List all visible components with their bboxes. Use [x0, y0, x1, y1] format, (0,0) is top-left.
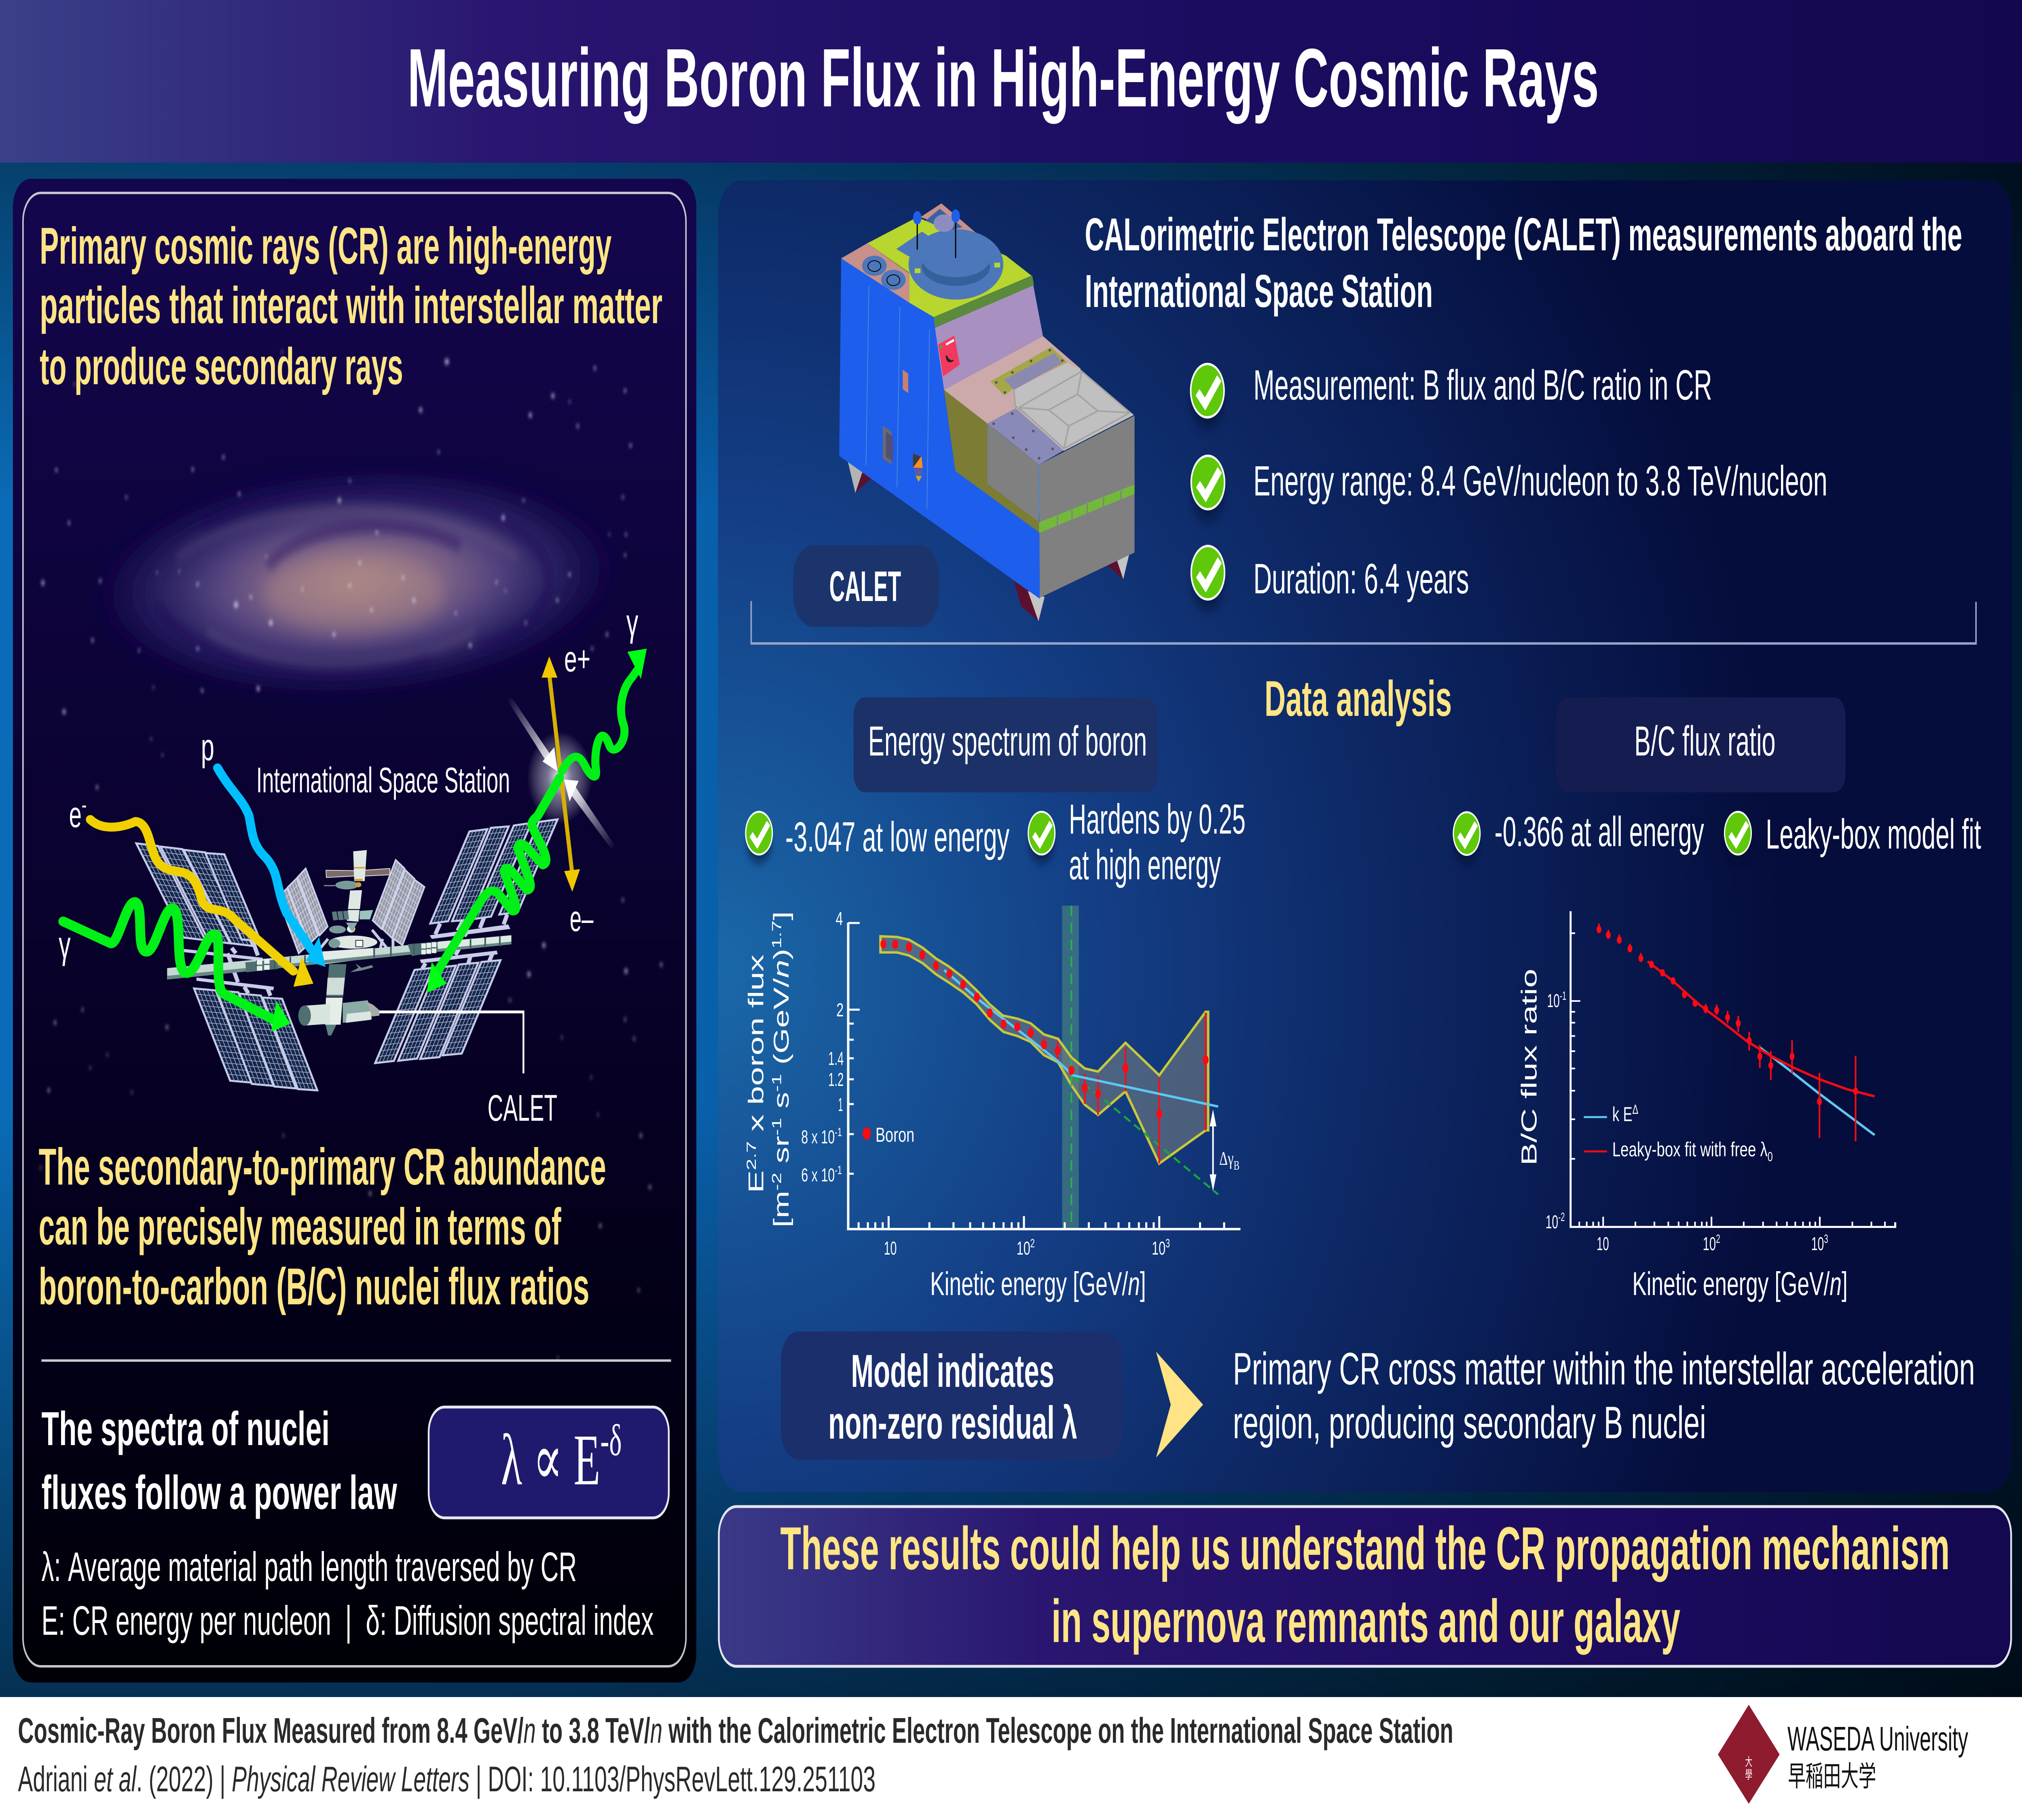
title banner: [0, 0, 2022, 163]
legend: boron: Boron: [876, 1123, 914, 1146]
text: secondary-to-primary abundance: can be precisely measured in terms of: [39, 1198, 561, 1256]
ISS illustration with cosmic-ray tracks: [39, 601, 671, 1644]
particle and station labels: e: [69, 794, 82, 835]
axis title: boron flux: [m: [770, 1189, 793, 1227]
legend: fits: [1612, 1102, 1773, 1164]
axis title: boron flux: x boron flux: [744, 954, 768, 1141]
boron checklist: at high energy: [1069, 841, 1221, 889]
citation text: Adriani et al. (2022) | Physical Review Letters | DOI: 10.1103/PhysRevLett.129.251103: [18, 1759, 876, 1799]
axis title: boron flux: (GeV/: [770, 978, 793, 1074]
y-axis tick labels: 1.4: [828, 1048, 844, 1069]
y-axis tick labels: 8 x 10: [801, 1127, 833, 1148]
conclusion banner: These results could help us understand the CR propagation mechanism: [780, 1515, 1950, 1583]
y-axis tick labels: 1.2: [828, 1069, 844, 1090]
heading: data analysis: Data analysis: [1265, 670, 1452, 726]
axis title: boron flux: s: [770, 1092, 793, 1118]
text: secondary-to-primary abundance: [39, 1138, 606, 1316]
title banner: Measuring Boron Flux in High-Energy Cosmic Rays: [408, 32, 1599, 124]
x-axis tick labels: 10: [1597, 1234, 1609, 1255]
measurement checklist: Energy range: 8.4 GeV/nucleon to 3.8 TeV/nucleon: [1253, 457, 1827, 505]
legend: fits: Leaky-box fit with free λ: [1612, 1138, 1745, 1161]
y-axis tick labels: 2: [836, 1000, 844, 1021]
y-axis tick labels: 10: [1546, 1212, 1559, 1233]
y-axis tick labels: 10: [1547, 990, 1560, 1012]
legend: fits: Δ: [1633, 1102, 1638, 1117]
text: power law: [41, 1402, 397, 1519]
model result box: non-zero residual λ: [828, 1397, 1077, 1449]
model result box: [781, 1331, 1123, 1460]
logo: Waseda University: WASEDA University: [1787, 1720, 1968, 1758]
citation text: Cosmic-Ray Boron Flux Measured from 8.4 GeV/n to 3.8 TeV/n with the Calorimetric Electron Telescope on the International Space Station: [18, 1711, 1453, 1750]
text: primary cosmic rays: particles that interact with interstellar matter: [40, 276, 662, 334]
y-axis tick labels: 1: [838, 1094, 843, 1115]
particle and station labels: p: [201, 726, 214, 768]
particle and station labels: [59, 601, 639, 1129]
text: model implication: Primary CR cross matter within the interstellar acceleration: [1233, 1344, 1975, 1395]
axis title: boron flux: 1.7: [770, 921, 784, 949]
axis title: boron flux: -2: [770, 1172, 784, 1191]
logo: Waseda University: 大: [1745, 1752, 1752, 1769]
model result box: Model indicates: [851, 1346, 1054, 1397]
particle and station labels: e+: [564, 638, 590, 679]
axis title: boron flux: ]: [770, 911, 793, 921]
legend: fits: k E: [1612, 1103, 1631, 1126]
x-axis tick labels: 2: [1030, 1237, 1035, 1250]
y-axis tick labels: 6 x 10: [801, 1165, 833, 1186]
panel: measurements and data analysis (right): [718, 180, 2012, 1492]
gamma track, right outgoing (green): [562, 649, 647, 777]
text: model implication: region, producing secondary B nuclei: [1233, 1397, 1706, 1448]
left panel background: [13, 179, 696, 1682]
text: symbol definitions: [41, 1544, 654, 1644]
x-axis tick labels: 3: [1824, 1232, 1828, 1246]
particle and station labels: International Space Station: [256, 760, 510, 800]
text: secondary-to-primary abundance: The secondary-to-primary CR abundance: [39, 1138, 606, 1196]
text: secondary-to-primary abundance: boron-to-carbon (B/C) nuclei flux ratios: [39, 1257, 590, 1316]
axis title: boron flux: sr: [770, 1136, 793, 1172]
y-axis tick labels: [801, 908, 844, 1186]
B/C flux ratio label: B/C flux ratio: [1634, 717, 1776, 765]
measurement checklist: [1191, 361, 1827, 610]
x-axis tick labels: 10: [1017, 1238, 1030, 1259]
text: primary cosmic rays: Primary cosmic rays (CR) are high-energy: [40, 217, 611, 275]
CALET label: [793, 545, 939, 627]
boron checklist: -3.047 at low energy: [785, 813, 1010, 861]
axis title: boron flux: -1: [770, 1118, 784, 1136]
formula box: -δ: [600, 1416, 622, 1465]
footer: [0, 1697, 2022, 1820]
y-axis tick labels: 4: [835, 908, 843, 929]
axis title: boron flux: [744, 911, 793, 1227]
formula box: [429, 1407, 669, 1518]
y-axis tick labels: -1: [835, 1164, 842, 1177]
citation text: [18, 1711, 1453, 1799]
axis title: kinetic energy: Kinetic energy [GeV/n]: [930, 1266, 1146, 1302]
axis title: B/C flux ratio: B/C flux ratio: [1517, 969, 1541, 1166]
logo: Waseda University: 學: [1745, 1765, 1752, 1782]
ISS central modules: [298, 935, 379, 1035]
ISS truss: [167, 935, 512, 980]
y-axis tick labels: -1: [1560, 989, 1566, 1003]
particle and station labels: -: [82, 791, 87, 818]
axis title: boron flux: E: [744, 1170, 768, 1193]
conclusion banner: in supernova remnants and our galaxy: [1051, 1587, 1680, 1655]
ISS solar arrays, left: [136, 843, 317, 1090]
right panel background: [718, 180, 2012, 1492]
particle and station labels: CALET: [488, 1088, 557, 1129]
text: primary cosmic rays: [40, 217, 662, 396]
gamma track, left (green): [63, 902, 290, 1032]
CALET label: CALET: [829, 562, 901, 610]
pair-production glow and arrows: [508, 656, 615, 892]
axis title: boron flux: 2.7: [744, 1141, 759, 1170]
B/C checklist: -0.366 at all energy: [1495, 808, 1704, 855]
boron checklist: [746, 796, 1246, 889]
electron track (yellow): [90, 819, 313, 987]
B/C checklist: [1453, 808, 1981, 863]
particle tracks and arrows: [63, 649, 647, 1032]
x-axis tick labels: 10: [1811, 1234, 1824, 1255]
measurement checklist: Duration: 6.4 years: [1253, 555, 1469, 603]
particle and station labels: e–: [570, 898, 594, 939]
conclusion banner: [719, 1507, 2011, 1666]
axis title: boron flux: n): [770, 948, 793, 978]
particle and station labels: γ: [626, 601, 639, 644]
text: symbol definitions: E: CR energy per nucleon | δ: Diffusion spectral index: [41, 1598, 654, 1644]
x-axis tick labels: 3: [1165, 1237, 1170, 1250]
x-axis tick labels: [1597, 1232, 1828, 1255]
plot area: [1571, 911, 1895, 1227]
ISS structure: [278, 850, 425, 953]
logo: Waseda University: [1718, 1705, 1968, 1804]
axis title: kinetic energy: Kinetic energy [GeV/n]: [1632, 1266, 1848, 1302]
gamma track, right incoming (green): [427, 778, 560, 993]
plot area: [848, 906, 1240, 1229]
delta gamma label: Δγ: [1219, 1147, 1233, 1169]
x-axis tick labels: 10: [884, 1238, 897, 1259]
x-axis tick labels: [884, 1237, 1170, 1259]
heading: CALET measurements: CALorimetric Electron Telescope (CALET) measurements aboard the: [1085, 209, 1962, 260]
heading: CALET measurements: International Space Station: [1085, 266, 1433, 317]
starfield: [40, 309, 662, 1359]
y-axis tick labels: [1546, 989, 1566, 1233]
x-axis tick labels: 10: [1152, 1238, 1165, 1259]
logo: Waseda University: 早稲田大学: [1788, 1753, 1876, 1794]
particle and station labels: γ: [59, 923, 71, 966]
text: power law: fluxes follow a power law: [41, 1466, 397, 1519]
energy spectrum label: Energy spectrum of boron: [868, 717, 1147, 765]
ISS solar arrays, right: [167, 819, 558, 1063]
formula box: λ ∝ E: [501, 1420, 604, 1500]
x-axis tick labels: 10: [1703, 1234, 1716, 1255]
delta gamma label: B: [1233, 1158, 1239, 1172]
text: power law: The spectra of nuclei: [41, 1402, 330, 1455]
proton track (blue): [218, 768, 326, 967]
chart: B/C flux ratio: [1517, 911, 1895, 1302]
y-axis tick labels: -2: [1558, 1211, 1565, 1224]
CALET pointer line: [379, 1012, 523, 1073]
axis title: boron flux: -1: [770, 1074, 784, 1092]
text: model implication: [1233, 1344, 1975, 1448]
measurement checklist: Measurement: B flux and B/C ratio in CR: [1253, 361, 1712, 409]
B/C checklist: Leaky-box model fit: [1766, 811, 1981, 857]
x-axis tick labels: 2: [1716, 1232, 1720, 1246]
B/C flux ratio label: [1556, 697, 1846, 792]
galaxy illustration: [84, 452, 629, 713]
heading: CALET measurements: [1085, 209, 1962, 317]
chart: boron energy spectrum: [744, 906, 1240, 1302]
text: primary cosmic rays: to produce secondary rays: [40, 337, 403, 396]
energy spectrum label: [854, 697, 1157, 792]
arrow: chevron: [1156, 1352, 1203, 1458]
boron checklist: Hardens by 0.25: [1069, 796, 1246, 843]
y-axis tick labels: -1: [835, 1126, 842, 1139]
icon: CALET instrument: [839, 203, 1134, 621]
text: symbol definitions: λ: Average material path length traversed by CR: [41, 1544, 577, 1590]
legend: fits: 0: [1768, 1149, 1773, 1164]
